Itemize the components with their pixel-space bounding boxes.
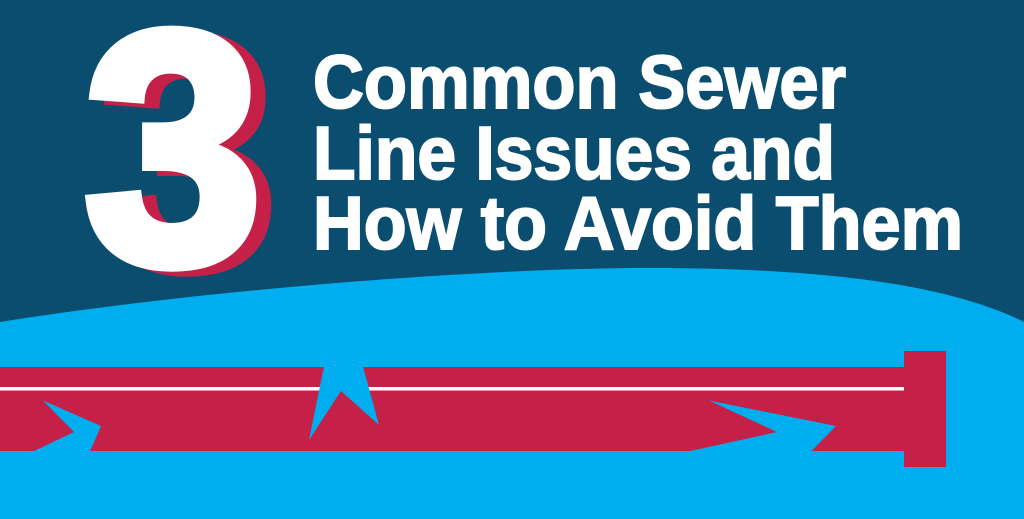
pipe highlight line: [0, 387, 904, 390]
title line 2: Line Issues and: [313, 111, 835, 195]
title line 3: How to Avoid Them: [313, 181, 963, 265]
big numeral 3 with red shadow: [84, 0, 277, 337]
title line 1: Common Sewer: [313, 40, 846, 124]
title: [313, 40, 963, 265]
sewer pipe: [0, 351, 946, 467]
crack: right: [688, 400, 836, 452]
water: light blue ground wave: [0, 268, 1024, 519]
pipe body: [0, 367, 904, 451]
crack: left: [33, 400, 101, 452]
crack: middle: [309, 366, 379, 440]
pipe end flange: [904, 351, 946, 467]
